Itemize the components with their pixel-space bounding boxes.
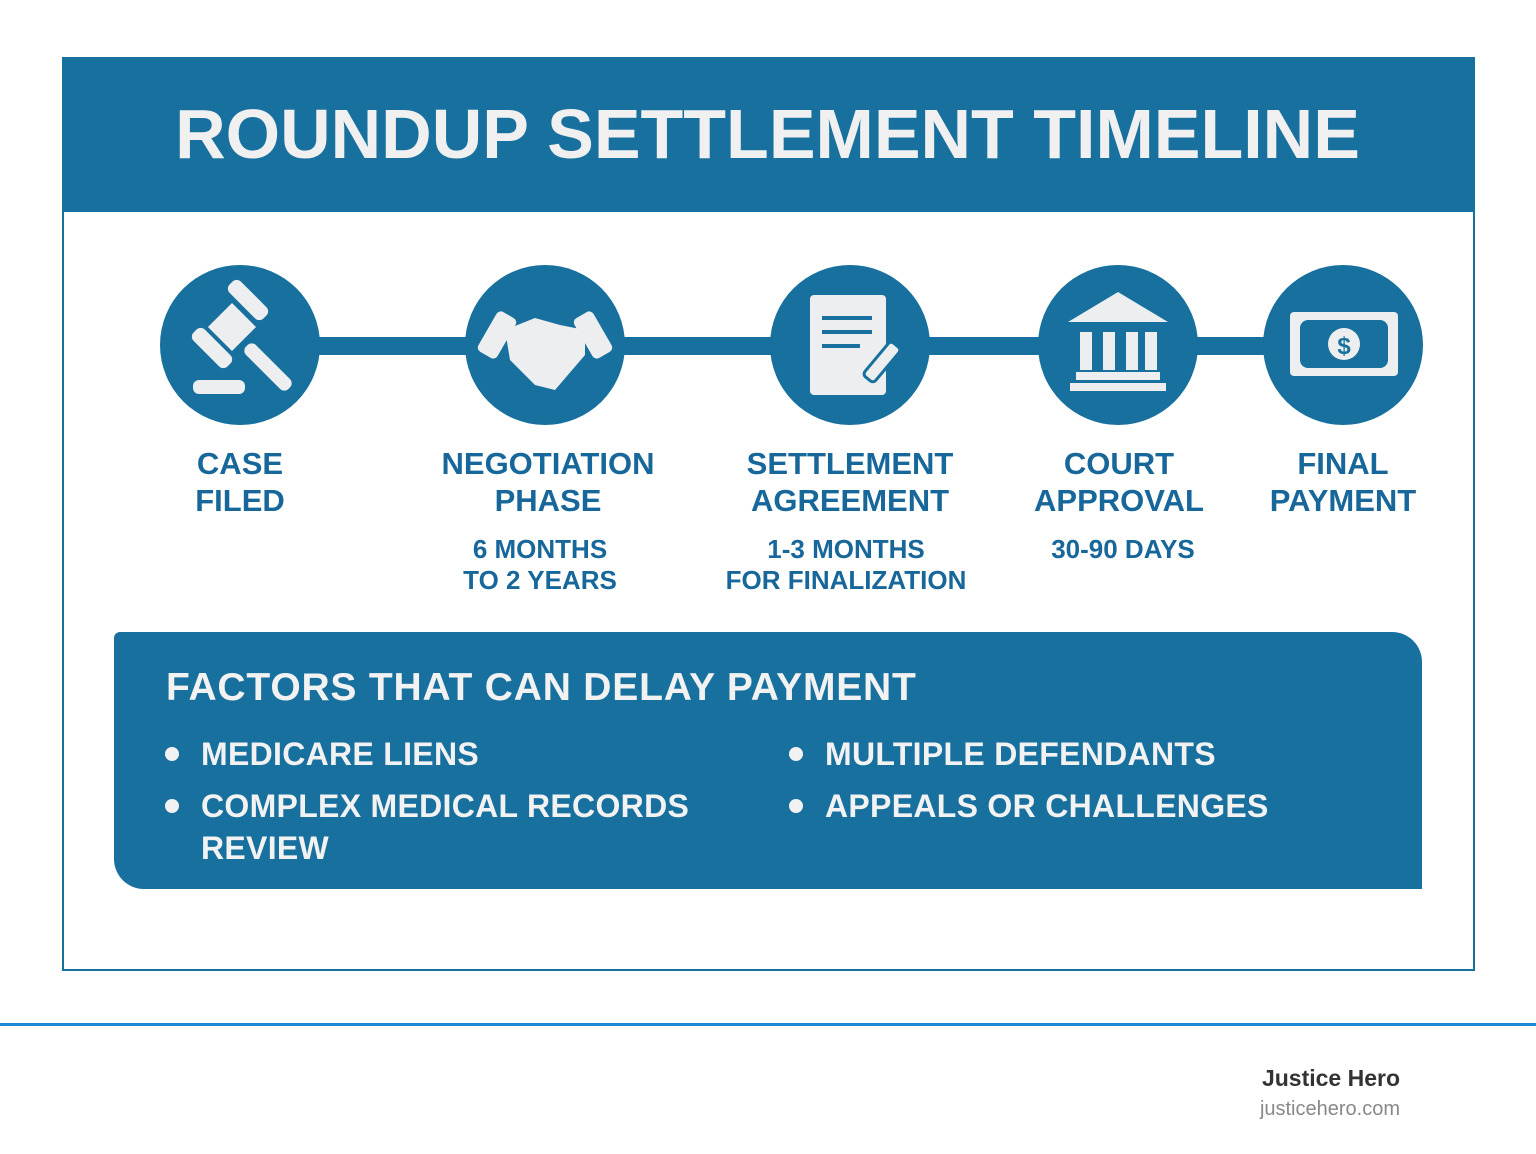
text: 30-90 DAYS [1051,534,1195,564]
panel: delay factors: COMPLEX MEDICAL RECORDS [201,788,689,824]
panel: delay factors: REVIEW [201,830,329,866]
panel: delay factors: MULTIPLE DEFENDANTS [825,736,1216,772]
heading: FACTORS THAT CAN DELAY PAYMENT [166,666,917,709]
icon: handshake [465,265,625,425]
icon: money [1263,265,1423,425]
text: AGREEMENT [751,483,949,518]
text: NEGOTIATION [442,446,654,481]
text: TO 2 YEARS [463,565,617,595]
frame [62,57,1475,971]
timeline [160,265,1423,425]
text: APPROVAL [1034,483,1204,518]
panel: delay factors [114,632,1422,889]
text: PHASE [495,483,601,518]
text: 6 MONTHS [473,534,607,564]
icon: courthouse [1038,265,1198,425]
text: COURT [1064,446,1174,481]
footer line [0,1023,1536,1026]
title bar [62,57,1473,212]
text: justicehero.com [1260,1098,1400,1120]
text: FOR FINALIZATION [726,565,966,595]
step labels [195,446,285,518]
text: FINAL [1297,446,1389,481]
step labels: FILED [195,483,285,518]
panel: delay factors: APPEALS OR CHALLENGES [825,788,1269,824]
step labels: CASE [197,446,283,481]
icon: document [770,265,930,425]
footer brand: Justice Hero [1262,1065,1400,1091]
title bar: ROUNDUP SETTLEMENT TIMELINE [175,95,1360,173]
icon: gavel [160,265,320,425]
panel: delay factors: MEDICARE LIENS [201,736,479,772]
text: 1-3 MONTHS [767,534,925,564]
icon: money: $ [1337,333,1351,360]
text: PAYMENT [1270,483,1416,518]
text: SETTLEMENT [747,446,953,481]
